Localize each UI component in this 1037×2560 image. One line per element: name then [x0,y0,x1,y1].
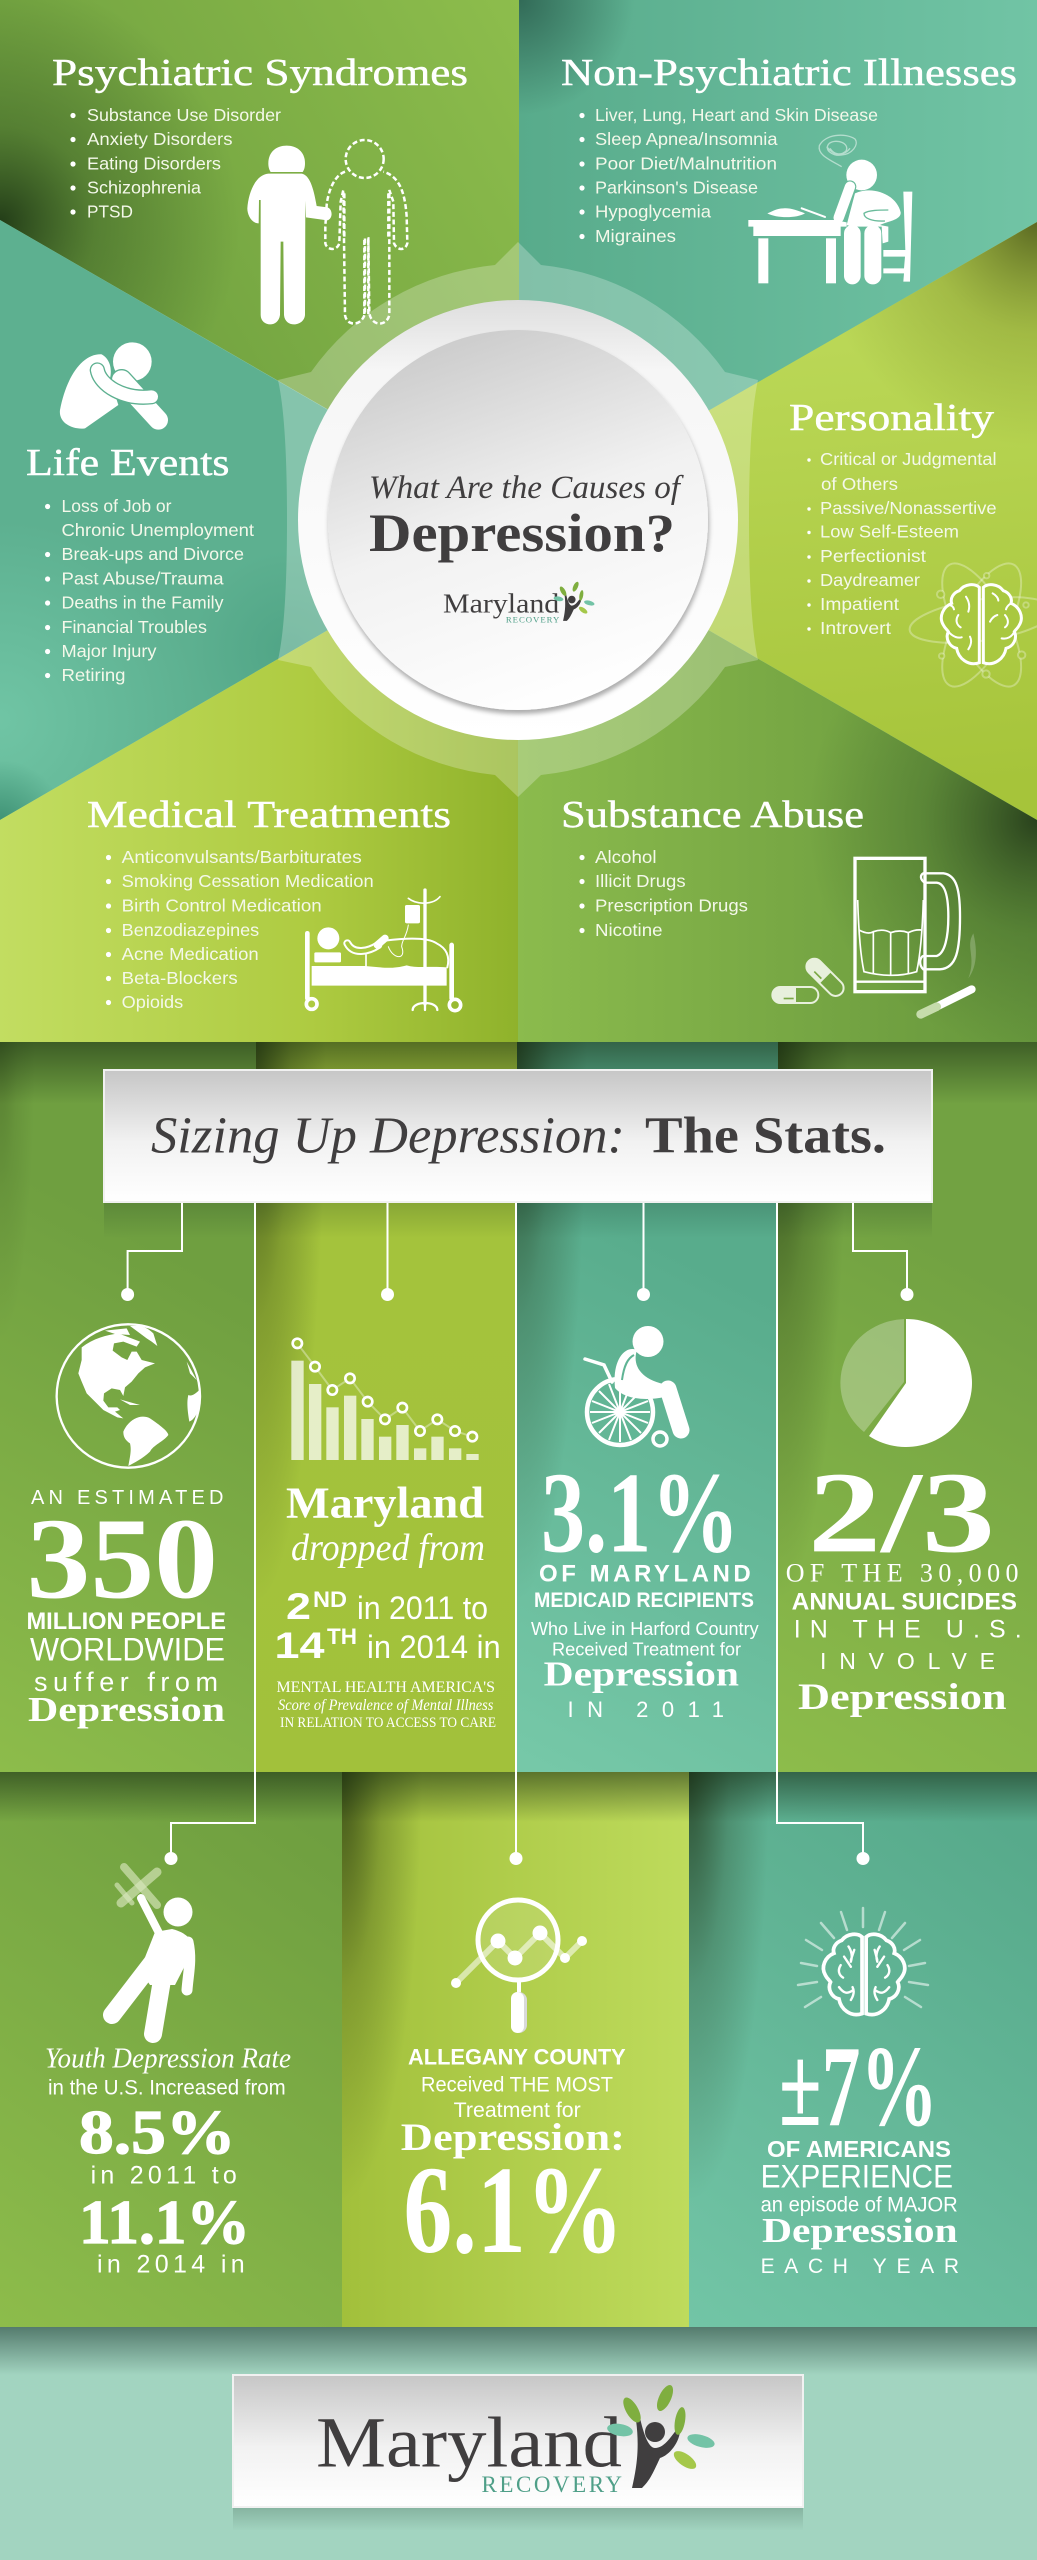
stat text: MEDICAID RECIPIENTS [534,1589,754,1612]
list: personality: Passive/Nonassertive [820,498,997,518]
stat text: 11.1% [79,2189,250,2257]
list: personality: Impatient [820,594,899,614]
list: non-psychiatric illnesses [579,105,878,246]
panel: psychiatric syndromes [0,0,519,520]
stat text: MENTAL HEALTH AMERICA'S [276,1679,495,1696]
stat text [26,1487,226,1729]
list: psychiatric syndromes: Anxiety Disorders [87,129,233,149]
list: personality: Perfectionist [820,546,926,566]
stat text [401,2045,626,2280]
stat text: EXPERIENCE [761,2159,953,2195]
list: life events: Major Injury [62,641,157,661]
list: non-psychiatric illnesses: Poor Diet/Malnutrition [595,153,777,173]
list: non-psychiatric illnesses: Sleep Apnea/Insomnia [595,129,778,149]
centre title: What Are the Causes of [369,470,684,506]
stat text: ±7% [779,2023,938,2150]
stat text: INVOLVE [820,1648,995,1674]
icon: child with toy plane [112,1867,193,2034]
logo icon: person with leaves [606,2383,716,2488]
stat text: EACH YEAR [761,2255,959,2278]
stat: 7 percent of Americans [761,1908,959,2278]
stat text: ANNUAL SUICIDES [792,1589,1017,1616]
stat text [45,2044,291,2279]
list: non-psychiatric illnesses: Migraines [595,226,676,246]
list: personality: of Others [821,474,898,494]
heading: substance abuse: Substance Abuse [561,794,864,836]
stat text: 2 [286,1586,311,1627]
stat: two thirds of suicides [786,1319,1022,1718]
icon: glowing brain [798,1908,928,2015]
stat text: Received THE MOST [421,2074,613,2097]
list: non-psychiatric illnesses: Parkinson's Disease [595,178,758,198]
stat text: TH [327,1624,357,1649]
list: personality: Introvert [820,618,891,638]
list: personality: Daydreamer [820,570,920,590]
stat: Maryland dropped [274,1339,501,1731]
list: psychiatric syndromes: Schizophrenia [87,178,201,198]
stat text: Treatment for [454,2099,581,2122]
list: personality [807,449,997,638]
panel: substance abuse [518,520,1037,1042]
stat text: in 2011 to [357,1590,488,1626]
stat text: IN THE U.S. [794,1616,1022,1644]
list: substance abuse: Alcohol [595,847,656,867]
heading: psychiatric syndromes: Psychiatric Syndromes [52,52,468,94]
list: medical treatments: Beta-Blockers [122,968,238,988]
small Maryland Recovery logo [443,581,595,624]
stat text: Maryland [286,1478,484,1528]
stat text: ALLEGANY COUNTY [408,2045,626,2070]
stat text: Score of Prevalence of Mental Illness [278,1697,493,1714]
lower stats columns background [0,1772,1037,2327]
stat text: ND [313,1587,347,1612]
heading: non-psychiatric illnesses: Non-Psychiatric Illnesses [561,52,1017,94]
icon: brain with atom orbits [907,552,1037,698]
centre title: Depression? [369,503,675,563]
list: non-psychiatric illnesses: Hypoglycemia [595,202,711,222]
stat text: IN 2011 [568,1697,724,1722]
stat text: in 2014 in [367,1629,501,1665]
icon: globe [57,1324,200,1468]
icon: person hugging knees [60,342,158,429]
stat text: WORLDWIDE [30,1632,225,1668]
list: substance abuse: Prescription Drugs [595,896,748,916]
stat: youth depression rate [45,1867,291,2279]
stat text: in 2011 to [91,2162,237,2190]
stat text: MILLION PEOPLE [26,1608,226,1635]
panel: medical treatments [0,520,518,1042]
heading: medical treatments: Medical Treatments [87,794,451,836]
stat text: Depression: [401,2116,625,2159]
stat text: 2/3 [808,1449,995,1577]
list: psychiatric syndromes [70,105,281,222]
list: life events: Loss of Job or [62,496,172,516]
list: life events: Retiring [62,665,126,685]
stat text: Who Live in Harford Country [531,1618,759,1639]
small Maryland Recovery logo: Maryland [443,589,560,619]
chart: pie two thirds [840,1319,972,1447]
list: personality: Critical or Judgmental [820,449,997,469]
stat text: Depression [762,2211,958,2250]
list: life events [45,496,254,685]
banner: sizing up depression [104,1070,932,1202]
footer logo box: RECOVERY [482,2472,622,2497]
list: life events: Financial Troubles [62,617,207,637]
panel: non-psychiatric illnesses [519,0,1037,520]
list: medical treatments: Benzodiazepines [122,920,259,940]
stat text: OF THE 30,000 [786,1558,1018,1588]
stat text: 350 [26,1496,218,1624]
stat text: IN RELATION TO ACCESS TO CARE [280,1715,496,1731]
stats section background columns [0,1042,1037,1772]
list: psychiatric syndromes: Substance Use Disorder [87,105,281,125]
stat text: Depression [544,1655,739,1694]
stat text: Received Treatment for [552,1639,741,1660]
stat text: in the U.S. Increased from [48,2077,286,2100]
list: substance abuse: Nicotine [595,920,662,940]
list: medical treatments: Birth Control Medication [122,896,322,916]
heading: life events: Life Events [26,442,230,484]
list: substance abuse [579,847,748,940]
icon: patient in hospital bed with IV [306,890,461,1011]
stat text: in 2014 in [97,2251,245,2279]
stat text: Youth Depression Rate [45,2044,291,2075]
stat text: Depression [798,1677,1007,1718]
heading: personality: Personality [789,397,994,439]
icon: beer mug, pills and cigarette [772,858,976,1014]
centre title [369,470,684,563]
list: life events: Chronic Unemployment [62,520,254,540]
icon: magnifier over line chart [451,1900,587,2033]
icon: person beside dashed outline [247,140,407,324]
list: medical treatments: Opioids [122,992,183,1012]
panel: life events [0,220,518,820]
list: life events: Deaths in the Family [62,592,224,612]
icon: person in wheelchair [585,1326,681,1446]
stat text: an episode of MAJOR [761,2194,958,2216]
connector lines and dots [121,1202,914,1865]
list: personality: Low Self-Esteem [820,522,959,542]
stat text: 8.5% [79,2099,236,2167]
stat text: 14 [274,1625,325,1666]
stat text: OF MARYLAND [539,1560,751,1588]
stat text [274,1478,501,1731]
stat text: 3.1% [541,1449,739,1577]
centre disc with title and logo [298,300,738,740]
stat text: 6.1% [403,2142,624,2280]
stat text [786,1449,1022,1718]
stat: Allegany County [401,1900,626,2280]
list: non-psychiatric illnesses: Liver, Lung, Heart and Skin Disease [595,105,878,125]
icon: person sitting at table with food [748,135,912,284]
banner: sizing up depression: The Stats. [645,1108,886,1164]
list: medical treatments [106,847,374,1012]
panel: personality [518,222,1037,820]
stat text [531,1449,759,1722]
stat text: suffer from [34,1667,218,1697]
list: substance abuse: Illicit Drugs [595,871,686,891]
footer logo box: Maryland [316,2403,622,2483]
stat text: OF AMERICANS [767,2136,951,2162]
stat text: dropped from [291,1527,485,1569]
banner: sizing up depression: Sizing Up Depression: [151,1108,625,1164]
small Maryland Recovery logo: RECOVERY [506,614,560,624]
list: medical treatments: Anticonvulsants/Barbiturates [122,847,362,867]
list: medical treatments: Smoking Cessation Medication [122,871,374,891]
centre halo [278,242,758,797]
stat text: Depression [28,1690,225,1729]
list: psychiatric syndromes: Eating Disorders [87,153,221,173]
list: psychiatric syndromes: PTSD [87,202,133,222]
list: life events: Past Abuse/Trauma [62,568,224,588]
footer band [0,2327,1037,2560]
list: medical treatments: Acne Medication [122,944,259,964]
stat: 3.1 percent of Medicaid recipients [531,1326,759,1722]
stat: 350 million people [26,1324,226,1729]
list: life events: Break-ups and Divorce [62,544,244,564]
stat text [761,2023,959,2278]
footer logo box [233,2375,803,2507]
stat text: AN ESTIMATED [31,1487,224,1509]
icon: declining bar chart [291,1339,479,1460]
